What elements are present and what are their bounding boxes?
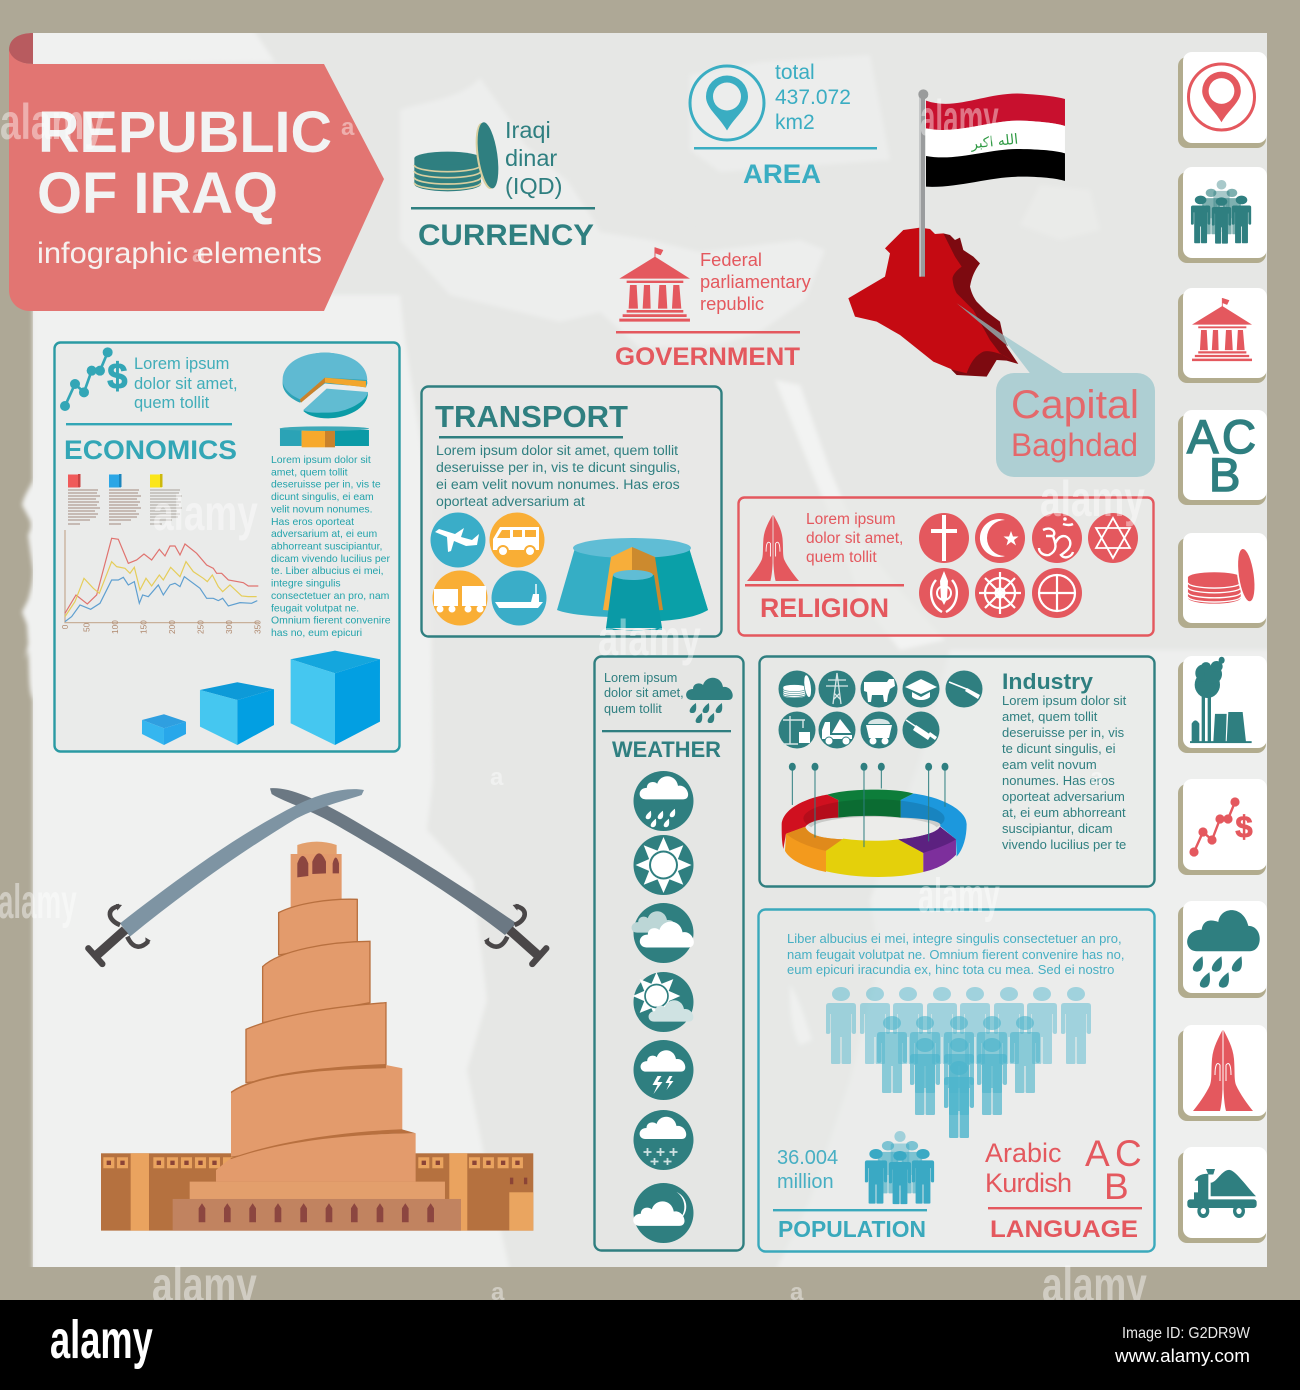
chart axis labels: 250 [195,620,205,634]
side icon tile: language: B [1209,448,1240,501]
currency value: (IQD) [505,173,562,199]
languages: Arabic [985,1138,1062,1168]
icon: om symbol [1032,513,1082,563]
chart pins [789,763,948,847]
pie chart [283,353,368,418]
economics paragraph: velit novum nonumes. [271,504,373,515]
industry paragraph: vivendo lucilius per te [1002,837,1126,852]
icon: coins [778,670,816,708]
weather heading: WEATHER [612,737,721,762]
chart axis labels: 0 [60,624,70,629]
area value: total [775,61,815,84]
alamy watermarks: alamy [153,486,258,541]
alamy watermarks: alamy [918,870,1000,923]
currency value: Iraqi [505,117,551,143]
panel: industry [760,656,1154,886]
population paragraph: eum epicuri iracundia ex, hinc tota cu mea. Sed ei nostro [787,962,1114,977]
alamy watermarks: a [790,1279,804,1306]
economics paragraph: has no, eum epicuri [271,628,362,639]
area value: 437.072 [775,86,851,109]
icon: letters A C B: C [1115,1133,1142,1174]
chart axis labels: 350 [253,620,263,634]
language heading: LANGUAGE [990,1216,1138,1243]
side icon tile: government [1178,288,1267,383]
palace wall [101,1153,533,1231]
flag of Iraq: الله اكبر [969,132,1019,153]
government heading: GOVERNMENT [615,343,800,371]
icon: syringe [902,712,940,748]
icon: sun and cloud [633,972,694,1032]
icon: plane [430,512,486,568]
currency heading: CURRENCY [418,219,594,252]
economics paragraph: abhorreant suscipiantur, [271,542,382,552]
footer image id: Image ID: G2DR9W [1122,1325,1251,1342]
icon: rain [634,771,694,831]
industry paragraph: at, ei eum abhorreant [1002,805,1126,820]
icon: circled cross [1032,568,1082,618]
alamy watermarks: a [490,764,504,791]
icon: chart with dollar: $ [107,356,127,397]
weather intro text: Lorem ipsum [604,671,677,685]
industry heading: Industry [1002,669,1094,694]
icon: khanda [919,568,969,618]
transport paragraph: ei eam velit novum nonumes. Has eros [436,476,680,492]
panel: economics [54,342,400,752]
icon: people group [865,1131,934,1204]
footer bar [0,1300,1300,1390]
area heading: AREA [743,159,821,189]
side icon tile: truck [1178,1147,1267,1243]
footer url: www.alamy.com [1114,1346,1250,1366]
economics intro text: quem tollit [134,394,210,412]
side icon tile: language: A [1187,410,1219,463]
currency value: dinar [505,145,557,171]
economics paragraph: te. Liber albucius ei mei, [271,566,384,577]
religion heading: RELIGION [760,593,889,623]
capital name: Baghdad [1011,427,1138,463]
minaret and swords illustration [88,788,546,1231]
economics paragraph: feugait volutpat ne. [271,603,359,614]
alamy watermarks: alamy [152,1258,257,1313]
icon: letters A C B: B [1104,1166,1129,1207]
subtitle: infographic elements [37,237,322,270]
religion intro text: dolor sit amet, [806,530,903,547]
icon: rain cloud [686,678,733,723]
industry paragraph: nonumes. Has eros [1002,773,1115,788]
side icon tile: economics: $ [1235,809,1253,844]
population heading: POPULATION [778,1216,926,1242]
icon: van [490,512,544,568]
economics paragraph: Lorem ipsum dolor sit [271,455,371,466]
chart axis labels [60,620,263,634]
economics intro text: Lorem ipsum [134,355,229,373]
flag of Iraq [926,93,1065,187]
religion intro text: Lorem ipsum [806,511,896,528]
chart axis labels: 150 [138,620,148,634]
ring chart [782,763,967,877]
population value: million [777,1171,834,1193]
icon: tanker train [432,570,488,626]
icon: sun [634,835,694,895]
footer logo: alamy [50,1310,153,1370]
chart axis labels: 200 [167,620,177,634]
panel: population and language [758,910,1154,1252]
icon: star of David [1088,513,1138,563]
icon: location pin [690,66,764,140]
panel: religion [738,498,1154,636]
alamy watermarks: alamy [598,610,701,666]
industry paragraph: te dicunt singulis, ei [1002,741,1116,756]
icon: letters A C B: A [1085,1133,1110,1174]
side icon tile: industry [1178,656,1267,753]
capital callout box [996,373,1155,477]
side icon tile: population [1178,167,1267,263]
government type: republic [700,293,764,314]
industry paragraph: deseruisse per in, vis [1002,725,1125,740]
transport paragraph: deseruisse per in, vis te dicunt singulis, [436,459,680,475]
icon: dump truck [818,712,856,748]
transport paragraph: Lorem ipsum dolor sit amet, quem tollit [436,442,678,458]
languages: Kurdish [985,1168,1072,1198]
icon: storm [634,1040,694,1100]
alamy watermarks: a [192,241,206,268]
side icon tile: weather [1178,901,1267,998]
population paragraph: nam feugait volutpat ne. Omnium fierent convenire has no, [787,947,1124,962]
icon: rifle [946,670,982,708]
icon: ship [492,570,546,626]
transport cone chart [557,538,708,630]
side icon tile: location [1178,52,1267,148]
chart axis labels: 300 [224,620,234,634]
economics paragraph: amet, quem tollit [271,467,348,478]
industry paragraph: oporteat adversarium [1002,789,1125,804]
icon: power pylon [818,670,856,708]
callout pointer [1003,335,1063,373]
industry paragraph: amet, quem tollit [1002,709,1098,724]
icon: chart with dollar [60,347,127,411]
alamy watermarks: a [341,114,355,141]
transport paragraph: oporteat adversarium at [436,493,585,509]
spiral minaret [173,842,461,1231]
economics paragraph: Omnium fierent convenire [271,616,391,627]
3D cubes [142,651,380,745]
religion intro text: quem tollit [806,549,877,566]
title text: republic: REPUBLIC [38,100,332,165]
icon: government building [619,247,690,322]
economics paragraph: deseruisse per in, vis te [271,480,381,491]
icon: moon and cloud [633,1183,694,1243]
title banner [9,33,384,311]
economics intro text: dolor sit amet, [134,375,238,393]
weather intro text: dolor sit amet, [604,686,684,700]
side icon tile: currency [1178,533,1267,628]
icon: snow [634,1110,694,1170]
alamy watermarks: alamy [1040,472,1145,527]
map of Iraq with capital callout [848,89,1065,377]
economics heading: ECONOMICS [64,435,237,465]
area value: km2 [775,111,815,134]
icon: cow [860,670,898,708]
population value: 36.004 [777,1147,838,1169]
economics paragraph: dicam vivendo lucilius per [271,554,390,565]
alamy watermarks: a [1090,764,1104,791]
side icon tile: religion [1178,1025,1267,1121]
economics paragraph: integre singulis [271,579,341,590]
icon: coins [414,121,502,191]
pie cross-section [280,426,369,447]
industry paragraph: eam velit novum [1002,757,1097,772]
icon: crane [778,712,816,748]
title text: of iraq: OF IRAQ [37,161,278,226]
economics paragraph: adversarium at, ei eum [271,529,377,540]
icon: clouds [632,903,694,963]
currency block [411,117,595,252]
flag pole [918,89,928,277]
icon: crescent and star [975,513,1025,563]
icon: dharma wheel [975,568,1025,618]
panel: transport [422,386,722,636]
alamy watermarks: alamy [0,875,77,929]
icon: mine cart [860,712,898,748]
alamy watermarks: alamy [0,95,105,150]
economics paragraph: consectetuer an pro, nam [271,591,389,602]
icon: graduation cap [902,670,940,708]
chart axis labels: 100 [110,620,120,634]
industry paragraph: suscipiantur, dicam [1002,821,1113,836]
side icon tile: economics [1178,779,1267,875]
transport heading: TRANSPORT [435,399,628,434]
government type: parliamentary [700,271,812,292]
industry paragraph: Lorem ipsum dolor sit [1002,693,1127,708]
alamy watermarks: alamy [920,89,999,146]
weather intro text: quem tollit [604,702,662,716]
chart legend [68,474,182,524]
area block [690,61,877,189]
side icon tile: language [1178,410,1267,505]
population paragraph: Liber albucius ei mei, integre singulis consectetuer an pro, [787,931,1122,946]
economics paragraph: dicunt singulis, ei eam [271,492,374,503]
capital label: Capital [1011,383,1139,427]
line chart [60,530,263,634]
economics paragraph: Has eros oporteat [271,517,354,528]
side icon tile: language: C [1222,410,1256,463]
alamy watermarks: alamy [1042,1258,1147,1313]
chart axis labels: 50 [81,622,91,632]
icon: cross [919,513,969,563]
panel: weather [594,656,744,1250]
alamy watermarks: a [491,1279,505,1306]
crossed swords [88,788,546,964]
government type: Federal [700,249,762,270]
icon: praying hands [747,515,799,581]
government block [615,247,812,371]
alamy watermarks [0,89,1147,1313]
people pictogram [826,987,1091,1138]
Iraq map [848,228,1018,377]
